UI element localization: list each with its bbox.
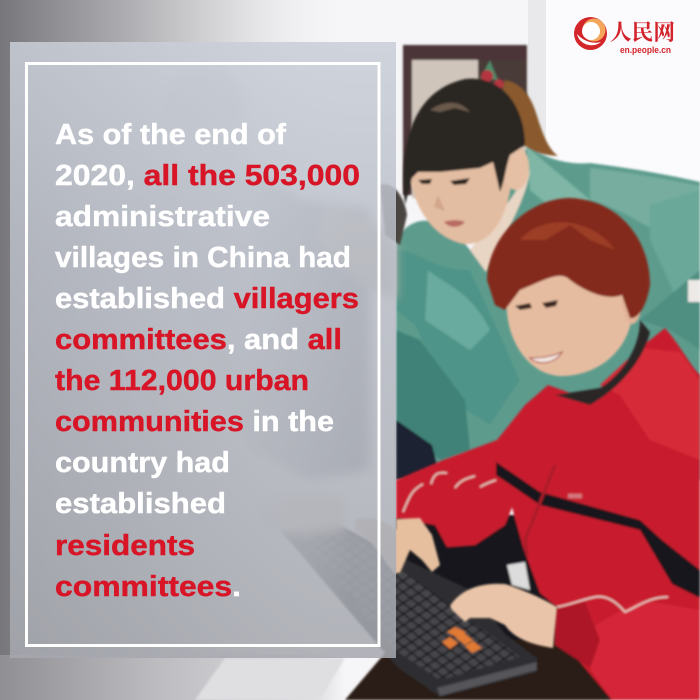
eyes and mouth [418, 179, 432, 184]
second hair clip bead [494, 79, 504, 89]
ear [622, 276, 642, 324]
chair white patch [507, 562, 530, 590]
hair parting highlight [430, 103, 470, 112]
panel border [26, 64, 379, 646]
red left sleeve [396, 440, 515, 547]
table [345, 640, 620, 700]
dark hair of person behind panel edge [380, 184, 407, 245]
black stripe [496, 462, 700, 598]
jacket brand label: 00000 [568, 494, 582, 500]
main statement text: established [55, 488, 226, 520]
hood [600, 348, 700, 460]
main statement text: committees , and all [55, 324, 342, 356]
keyboard front lip [437, 662, 537, 696]
smile [530, 352, 562, 363]
photo: keyboard [280, 520, 537, 697]
face [507, 270, 633, 376]
icon: logo circle [574, 17, 607, 50]
photo: left gray fade [0, 0, 350, 660]
cuff [555, 602, 600, 668]
sweater collar [470, 170, 530, 272]
main statement text: administrative [55, 201, 270, 233]
eyes [515, 300, 558, 310]
ear [503, 146, 529, 190]
panel: translucent text card [10, 42, 396, 658]
main statement text: As of the end of [55, 119, 286, 151]
logo Chinese wordmark: 人民网 [610, 20, 675, 45]
main statement text: country had [55, 447, 230, 479]
logo URL: en.people.cn [620, 45, 671, 55]
right sleeve piping [557, 597, 668, 612]
dark collar [555, 320, 650, 405]
main statement text: villages in China had [55, 242, 351, 274]
zipper [525, 465, 555, 555]
main statement text: 2020, all the 503,000 [55, 160, 360, 192]
hair highlight [520, 222, 615, 250]
logo: People's Daily Online [574, 17, 675, 55]
sleeve piping [403, 473, 496, 512]
right sleeve [570, 600, 700, 700]
main statement text: communities in the [55, 406, 334, 438]
main statement text: the 112,000 urban [55, 365, 309, 397]
photo: woman in red jacket [345, 198, 700, 700]
photo: hands [355, 518, 557, 648]
ponytail [500, 80, 558, 156]
photo: woman in green jacket [396, 60, 700, 480]
hair clip [480, 60, 498, 80]
main statement text: residents [55, 530, 195, 562]
main statement text: committees . [55, 571, 241, 603]
chair and dark gap [396, 515, 575, 660]
photo: door frame [403, 45, 527, 198]
main statement text: established villagers [55, 283, 359, 315]
red body [497, 328, 700, 700]
face [410, 120, 512, 244]
hair [487, 198, 650, 318]
hair [403, 79, 525, 205]
main statement text [55, 119, 360, 603]
photo: faded table strip at bottom left [0, 655, 345, 700]
orange keys [442, 627, 482, 653]
photo: ghost figures behind panel [130, 67, 396, 535]
